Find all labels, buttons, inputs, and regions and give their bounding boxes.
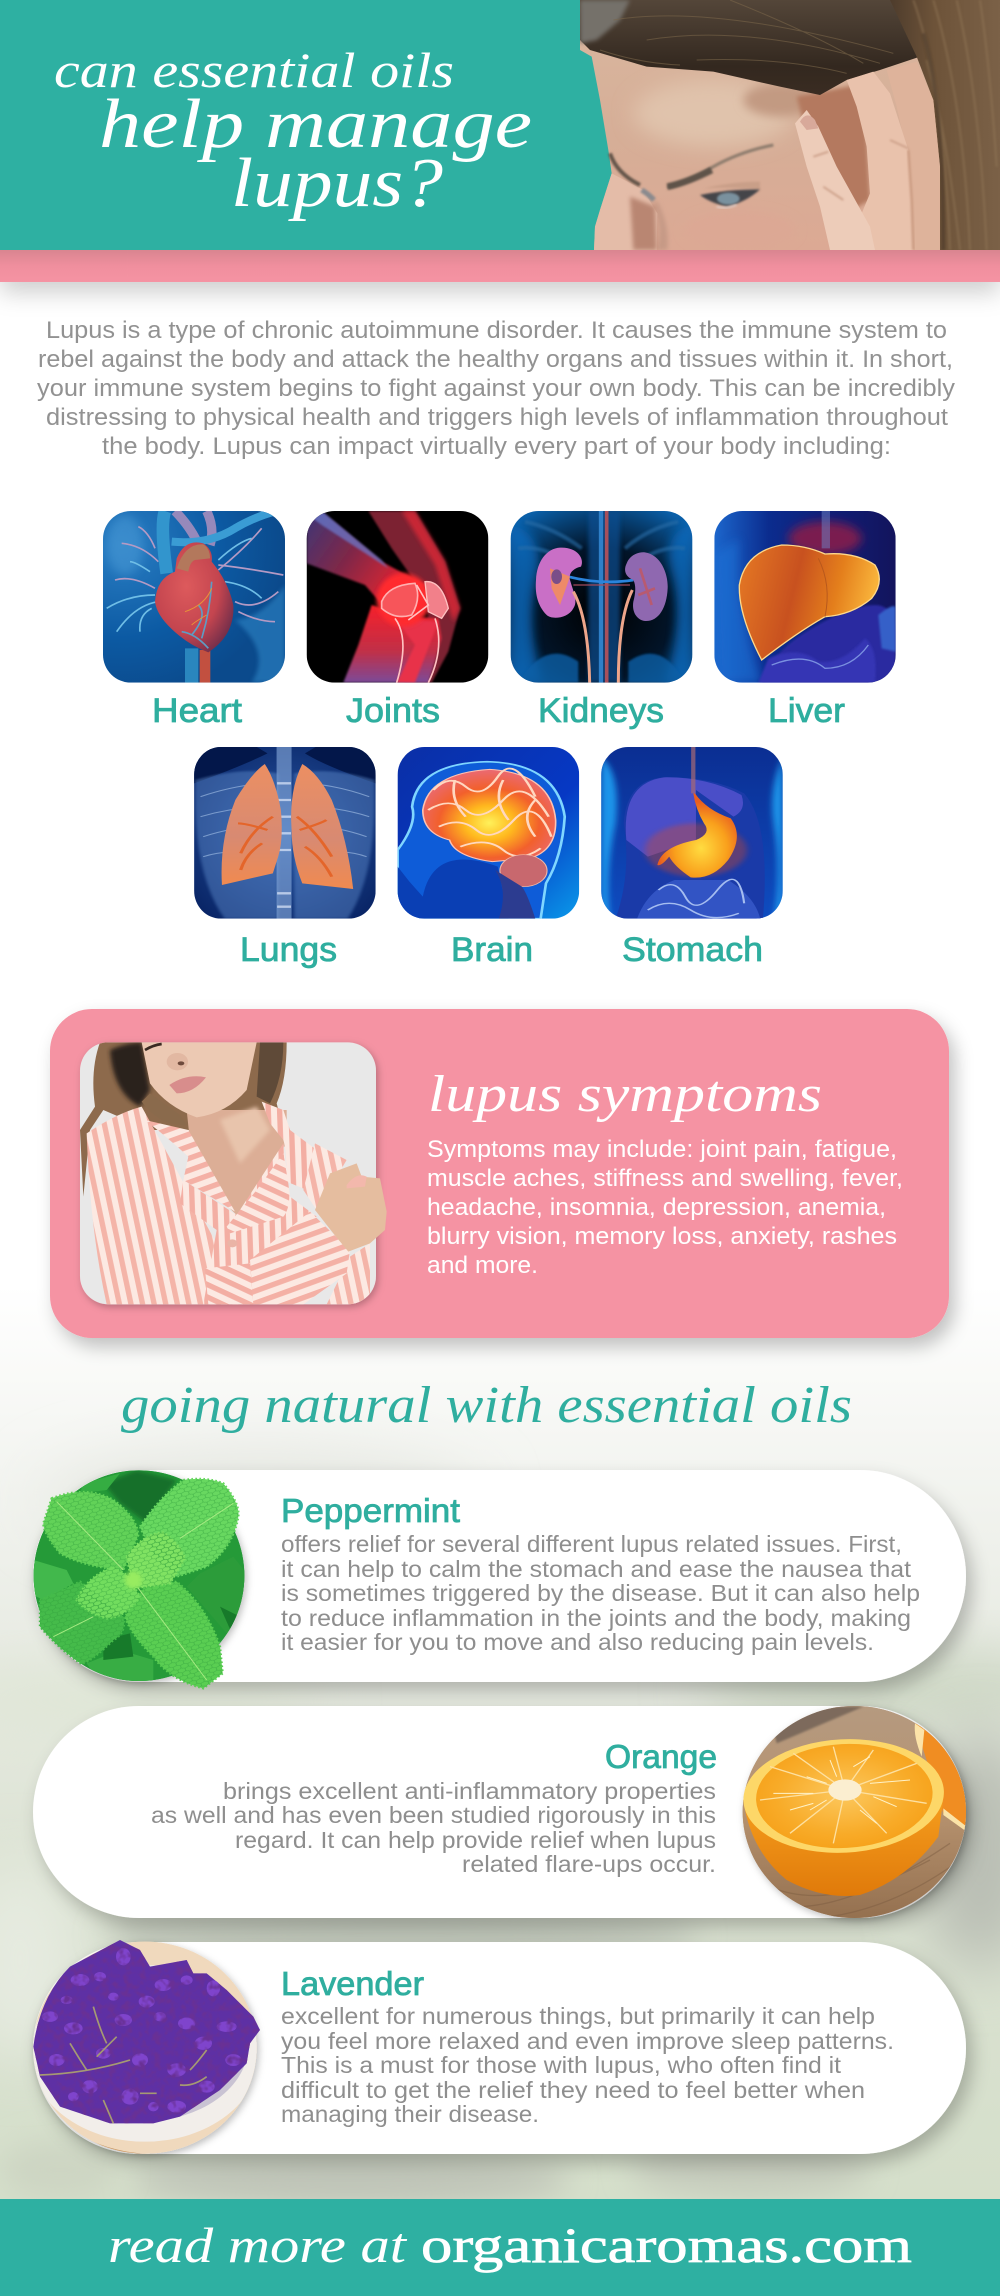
intro paragraph: the body. Lupus can impact virtually every part of your body including: (102, 433, 891, 460)
right hand fingers (915, 96, 940, 250)
peppermint text: offers relief for several different lupus related issues. First, (281, 1531, 902, 1557)
symptoms text: headache, insomnia, depression, anemia, (427, 1194, 886, 1221)
card: lavender: Lavender (281, 1965, 424, 2002)
orange text: brings excellent anti-inflammatory properties (223, 1778, 716, 1804)
image: heart (103, 511, 285, 683)
footer banner (0, 2199, 1000, 2296)
panel: lupus symptoms (50, 1009, 949, 1338)
header photo: woman holding temples (580, 0, 1000, 250)
shirt sleeves and body (87, 1107, 223, 1304)
title: can essential oils (54, 42, 454, 98)
symptoms text: muscle aches, stiffness and swelling, fever, (427, 1165, 903, 1192)
intro paragraph: distressing to physical health and triggers high levels of inflammation throughout (46, 404, 948, 431)
pink band under header (0, 250, 1000, 282)
symptoms text: and more. (427, 1252, 538, 1279)
eye (714, 182, 760, 189)
organ labels: Liver (768, 692, 845, 730)
lavender text: This is a must for those with lupus, who often find it (281, 2052, 842, 2078)
top hair (580, 0, 920, 95)
orange text: as well and has even been studied rigorously in this (151, 1802, 716, 1828)
symptoms text: blurry vision, memory loss, anxiety, rashes (427, 1223, 897, 1250)
footer banner: organicaromas.com (421, 2217, 912, 2273)
image: orange halves (740, 1703, 970, 1920)
lavender text: managing their disease. (281, 2101, 539, 2127)
hand on shoulder (315, 1163, 387, 1252)
image: mint leaves (30, 1467, 250, 1688)
photo: woman in striped shirt (80, 1042, 387, 1304)
peppermint text: it easier for you to move and also reducing pain levels. (281, 1629, 874, 1655)
image: lavender bowl (30, 1937, 263, 2157)
panel: lupus symptoms: lupus symptoms (428, 1066, 822, 1123)
left eyebrow and eye (610, 153, 640, 185)
intro paragraph: rebel against the body and attack the healthy organs and tissues within it. In short, (38, 346, 953, 373)
peppermint text (281, 1531, 920, 1655)
lavender text: you feel more relaxed and even improve sleep patterns. (281, 2028, 894, 2054)
peppermint text: to reduce inflammation in the joints and the body, making (281, 1605, 911, 1631)
lavender text: excellent for numerous things, but primarily it can help (281, 2003, 875, 2029)
organ labels: Lungs (240, 931, 337, 969)
orange text (151, 1778, 716, 1877)
image: stomach (601, 747, 783, 919)
organ labels: Kidneys (538, 692, 664, 730)
image: brain (398, 747, 579, 919)
symptoms text: Symptoms may include: joint pain, fatigue, (427, 1136, 897, 1163)
title: help manage (99, 86, 532, 163)
intro paragraph: your immune system begins to fight against your own body. This can be incredibly (37, 375, 956, 402)
image: joints (307, 511, 488, 683)
card: orange (33, 1703, 970, 1920)
symptoms text (427, 1136, 903, 1279)
left hand (594, 173, 657, 250)
image: lungs (194, 747, 376, 919)
card: peppermint: Peppermint (281, 1492, 460, 1529)
lavender text (281, 2003, 894, 2127)
intro paragraph (37, 317, 956, 460)
intro paragraph: Lupus is a type of chronic autoimmune disorder. It causes the immune system to (46, 317, 947, 344)
peppermint text: is sometimes triggered by the disease. But it can also help (281, 1580, 920, 1606)
lavender text: difficult to get the relief they need to feel better when (281, 2077, 865, 2103)
organ labels: Heart (152, 692, 243, 730)
heading: going natural: going natural with essential oils (121, 1377, 852, 1434)
title (54, 42, 532, 222)
orange text: related flare-ups occur. (462, 1851, 716, 1877)
hair strand over collar (142, 1094, 151, 1104)
image: liver (714, 511, 896, 683)
organ labels (152, 692, 845, 969)
orange text: regard. It can help provide relief when lupus (235, 1827, 716, 1853)
organ labels: Joints (346, 692, 440, 730)
long hair on right (890, 0, 1000, 250)
organ labels: Brain (451, 931, 533, 969)
card: orange: Orange (605, 1738, 717, 1775)
title: lupus? (231, 145, 443, 222)
header panel (0, 0, 1000, 250)
card: peppermint (30, 1467, 966, 1688)
right eyebrow (667, 145, 773, 187)
footer banner: read more at (108, 2217, 407, 2273)
image: kidneys (511, 511, 692, 683)
peppermint text: it can help to calm the stomach and ease the nausea that (281, 1556, 912, 1582)
nose shading (655, 202, 668, 250)
organ labels: Stomach (622, 931, 763, 969)
card: lavender (30, 1937, 966, 2157)
